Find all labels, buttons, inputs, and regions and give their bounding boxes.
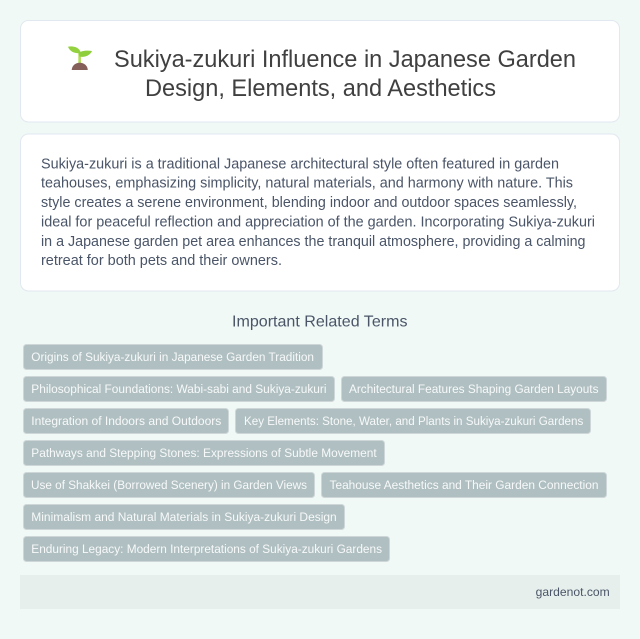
tag bbox=[24, 504, 344, 530]
panel: title card bbox=[20, 20, 620, 122]
tag bbox=[24, 536, 390, 562]
tag: Integration of Indoors and Outdoors bbox=[31, 414, 221, 428]
footer: gardenot.com bbox=[536, 585, 610, 599]
tag: Teahouse Aesthetics and Their Garden Connection bbox=[330, 478, 598, 492]
tag bbox=[24, 472, 314, 498]
tag bbox=[342, 376, 606, 402]
text block: description: style creates a serene environment, blending indoor and outdoor spaces seamlessly, bbox=[41, 195, 577, 211]
tag bbox=[24, 408, 228, 434]
panel: description bbox=[20, 134, 620, 291]
tag: Use of Shakkei (Borrowed Scenery) in Garden Views bbox=[31, 478, 307, 492]
title: Sukiya-zukuri Influence in Japanese Garden bbox=[114, 46, 576, 73]
tag: Origins of Sukiya-zukuri in Japanese Garden Tradition bbox=[31, 350, 314, 364]
tag bbox=[322, 472, 606, 498]
text block: description: teahouses, emphasizing simplicity, natural materials, and harmony with nature. This bbox=[41, 176, 573, 192]
tag: Pathways and Stepping Stones: Expressions of Subtle Movement bbox=[31, 446, 377, 460]
tag: Philosophical Foundations: Wabi-sabi and Sukiya-zukuri bbox=[31, 382, 327, 396]
tag: Minimalism and Natural Materials in Sukiya-zukuri Design bbox=[31, 510, 337, 524]
title bbox=[114, 46, 576, 102]
text block: description: retreat for both pets and their owners. bbox=[41, 253, 282, 269]
footer bbox=[20, 575, 620, 609]
tag bbox=[24, 376, 334, 402]
tag bbox=[24, 440, 384, 466]
heading: related terms: Important Related Terms bbox=[232, 314, 408, 330]
tag: Key Elements: Stone, Water, and Plants in Sukiya-zukuri Gardens bbox=[244, 414, 583, 428]
text block: description: in a Japanese garden pet area enhances the tranquil atmosphere, providing a calming bbox=[41, 234, 586, 250]
tag bbox=[24, 344, 322, 370]
title: Design, Elements, and Aesthetics bbox=[145, 75, 496, 102]
tag: Enduring Legacy: Modern Interpretations of Sukiya-zukuri Gardens bbox=[31, 542, 382, 556]
text block: description: ideal for peaceful reflection and appreciation of the garden. Incorporating Sukiya-zukuri bbox=[41, 214, 595, 230]
text block: description: Sukiya-zukuri is a traditional Japanese architectural style often featured in garden bbox=[41, 156, 559, 172]
panel: related terms tags bbox=[24, 344, 606, 562]
text block: description bbox=[41, 156, 595, 269]
tag bbox=[236, 408, 590, 434]
icon: seedling bbox=[68, 46, 92, 70]
tag: Architectural Features Shaping Garden Layouts bbox=[349, 382, 598, 396]
